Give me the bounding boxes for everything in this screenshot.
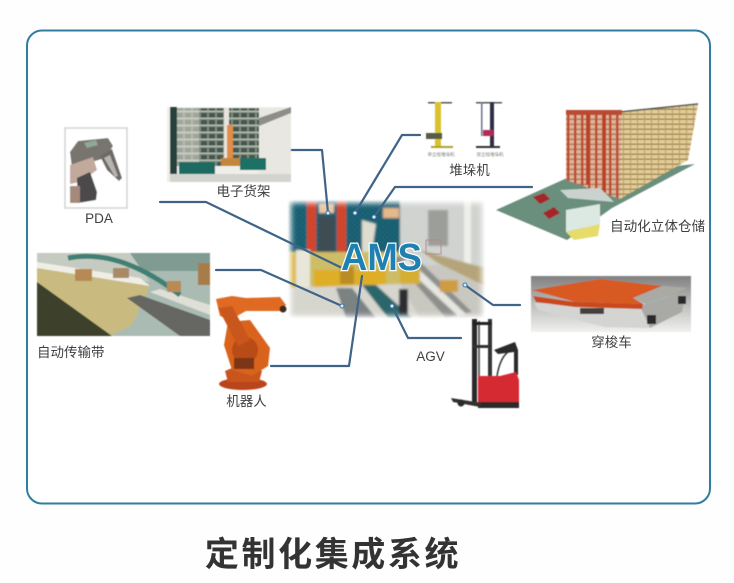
label: 电子货架: 电子货架: [216, 183, 270, 199]
connector lines: [160, 135, 532, 366]
label: 机器人: 机器人: [226, 394, 267, 409]
icon: stacker cranes: [426, 102, 504, 158]
central image: AMS warehouse scene: [288, 200, 485, 318]
label: 堆垛机: 堆垛机: [449, 163, 490, 178]
label: 自动传输带: 自动传输带: [37, 345, 104, 360]
icon: red AGV forklift: [451, 319, 519, 408]
icon: orange robot arm: [216, 296, 286, 390]
icon: stacker cranes: 双立柱堆垛机: [476, 151, 504, 158]
icon: shuttle car: [531, 276, 691, 332]
connector nodes: [326, 211, 467, 308]
icon: stacker cranes: 单立柱堆垛机: [428, 151, 455, 158]
label: 穿梭车: 穿梭车: [591, 334, 632, 350]
AMS label: AMS: [341, 237, 422, 279]
label: 自动化立体仓储: 自动化立体仓储: [610, 219, 706, 234]
icon: automated warehouse: [496, 104, 698, 240]
icon: automatic conveyor photo: [37, 253, 210, 336]
label: AGV: AGV: [416, 349, 445, 364]
icon: PDA scanner card: [65, 128, 127, 208]
AMS inset frame: [426, 240, 441, 254]
icon: electronic shelf photo: [167, 107, 291, 182]
title: 定制化集成系统: [205, 536, 461, 574]
label: PDA: PDA: [85, 211, 113, 226]
panel: rounded frame: [27, 30, 710, 504]
